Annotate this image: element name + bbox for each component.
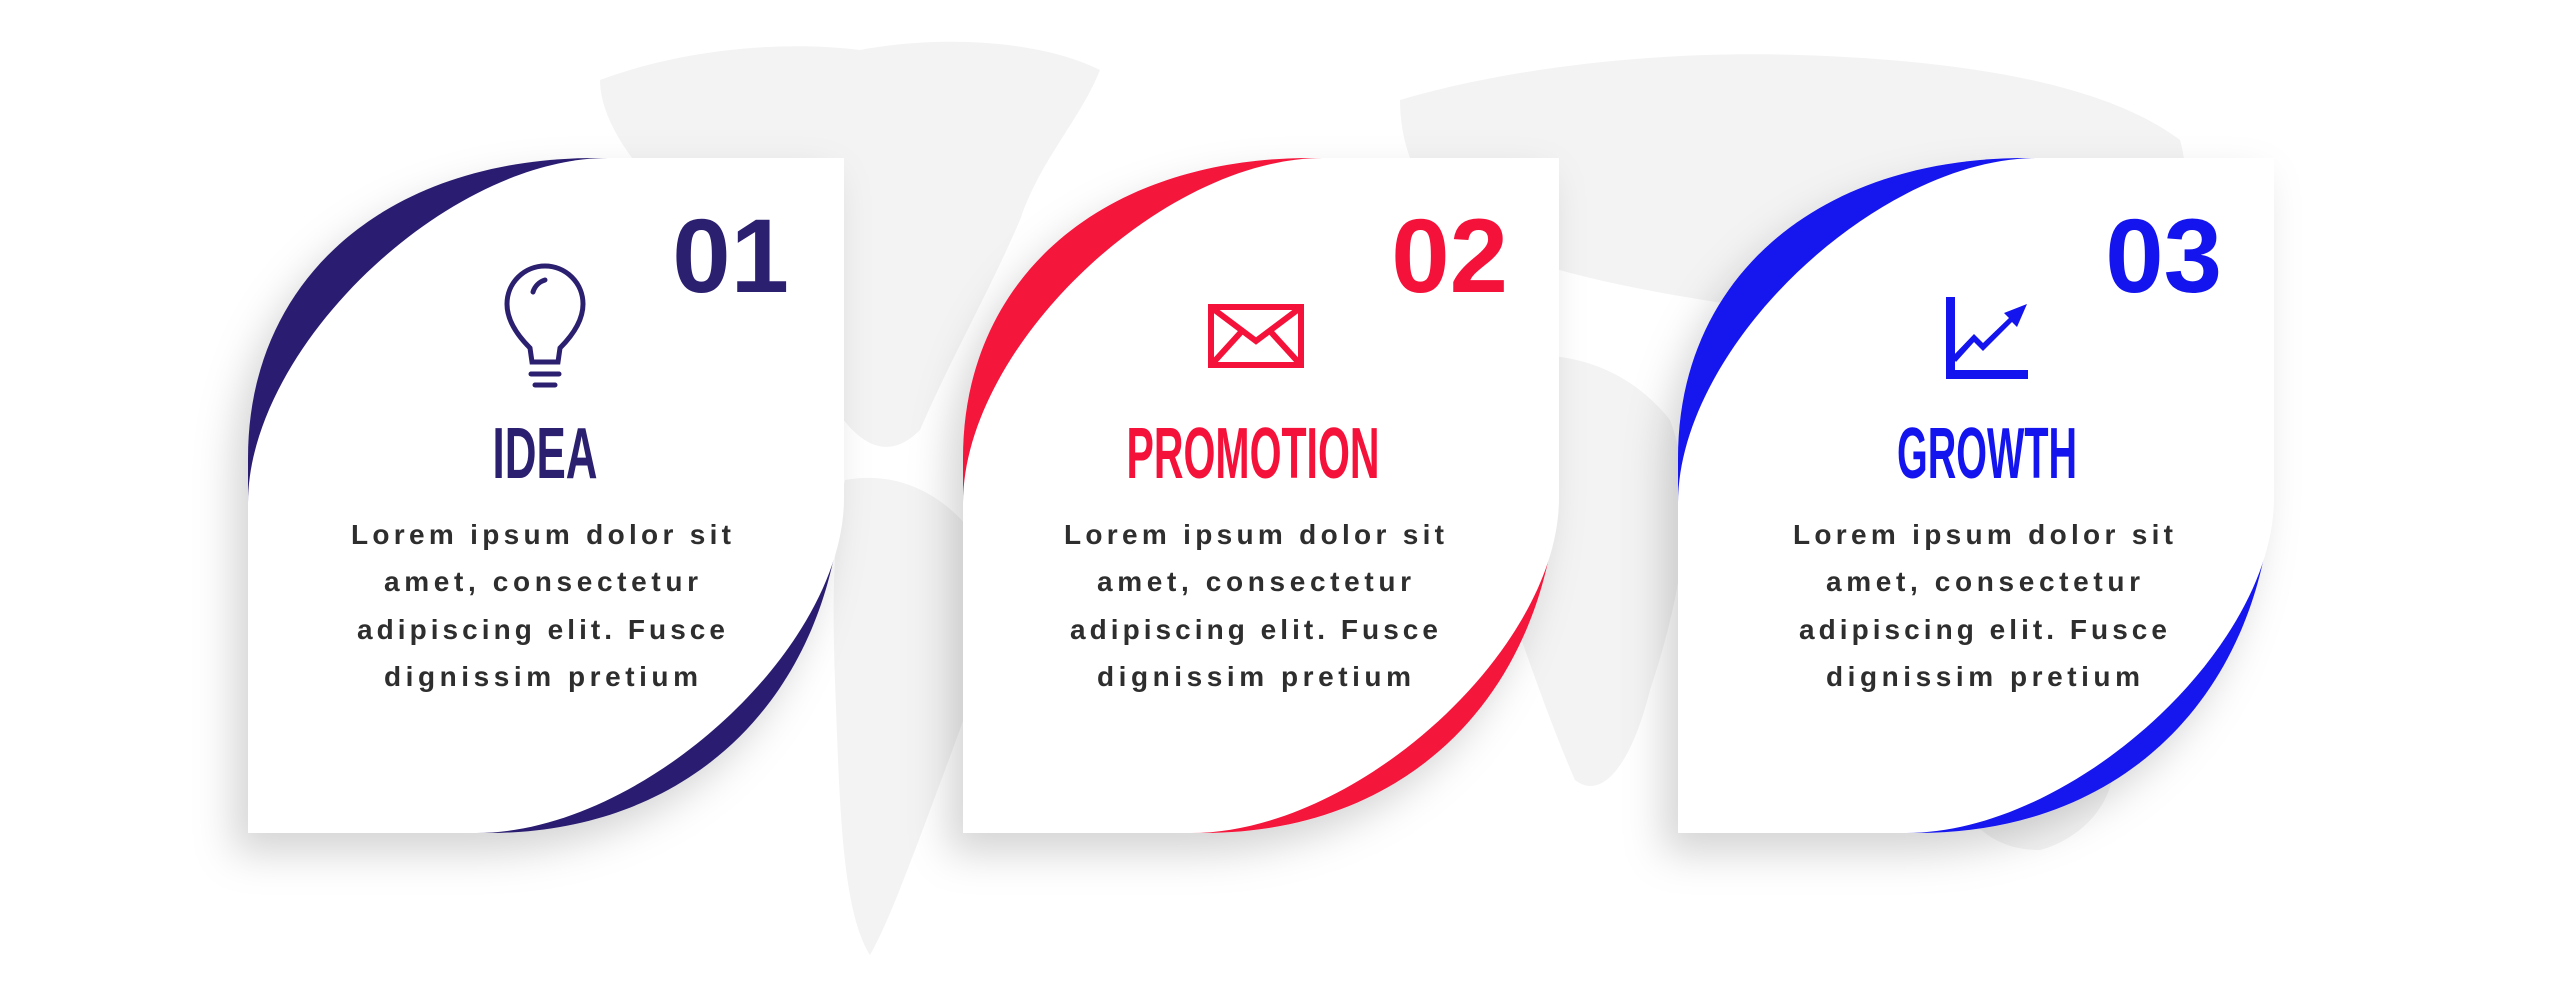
- panel: promotion: [963, 158, 1559, 833]
- body text: Lorem ipsum dolor sit: [1064, 519, 1444, 550]
- body text: amet, consectetur: [384, 566, 698, 597]
- body text: amet, consectetur: [1097, 566, 1411, 597]
- icon: growth chart: [1946, 297, 2028, 379]
- body text: amet, consectetur: [1826, 566, 2140, 597]
- body text: dignissim pretium: [1826, 661, 2140, 692]
- body text: dignissim pretium: [384, 661, 698, 692]
- panel: growth: [1678, 158, 2274, 833]
- body text: adipiscing elit. Fusce: [357, 614, 725, 645]
- icon: envelope: [1211, 307, 1301, 365]
- body text: adipiscing elit. Fusce: [1070, 614, 1438, 645]
- body text: dignissim pretium: [1097, 661, 1411, 692]
- heading: IDEA: IDEA: [492, 414, 598, 494]
- panel: idea: [248, 158, 844, 833]
- icon: light bulb: [507, 266, 583, 385]
- heading: GROWTH: GROWTH: [1897, 414, 2077, 494]
- heading: PROMOTION: PROMOTION: [1126, 414, 1380, 494]
- body text: [1793, 519, 2173, 692]
- body text: Lorem ipsum dolor sit: [1793, 519, 2173, 550]
- number 01: 01: [672, 198, 789, 315]
- body text: adipiscing elit. Fusce: [1799, 614, 2167, 645]
- body text: [351, 519, 731, 692]
- world map background: [600, 42, 2185, 955]
- body text: [1064, 519, 1444, 692]
- body text: Lorem ipsum dolor sit: [351, 519, 731, 550]
- number 03: 03: [2105, 198, 2222, 315]
- number 02: 02: [1391, 198, 1508, 315]
